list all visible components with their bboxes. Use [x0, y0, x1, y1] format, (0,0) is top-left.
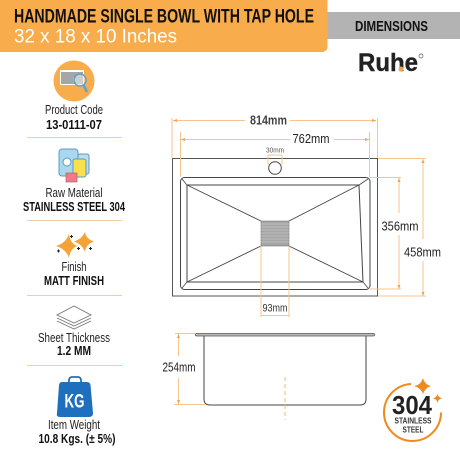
- badge: 304 stainless steel: STEEL: [402, 426, 424, 434]
- drain: [261, 221, 289, 246]
- dimension: 762mm bowl width: 762mm: [292, 132, 330, 146]
- sink side view: [196, 334, 374, 420]
- sink top view: [172, 158, 378, 296]
- icon: KG weight: KG: [64, 392, 84, 412]
- icon: steel drums: [59, 149, 89, 182]
- tap hole: [269, 162, 281, 174]
- dimension: 356mm bowl depth: [370, 178, 418, 289]
- raw material item: [23, 149, 125, 214]
- dimension: 762mm bowl width: [180, 132, 370, 177]
- dimension: 30mm tap hole: 30mm: [266, 148, 284, 154]
- panel: specifications: [23, 60, 125, 446]
- dimension: 30mm tap hole: [266, 148, 284, 165]
- dimension: 254mm height: 254mm: [162, 360, 196, 374]
- dimensions tab: DIMENSIONS: [355, 18, 428, 35]
- title banner: [0, 0, 328, 52]
- icon: barcode under magnifier: [54, 60, 94, 102]
- dimension: 814mm width: [172, 114, 378, 158]
- dimension: 814mm width: 814mm: [250, 114, 287, 128]
- icon: sparkles: [56, 232, 94, 258]
- product code item: Product Code: [45, 103, 103, 117]
- finish item: MATT FINISH: [44, 274, 104, 288]
- brand logo: Ruhe: [358, 49, 418, 77]
- badge: 304 stainless steel: 304: [392, 390, 432, 420]
- dimension: 458mm overall depth: [378, 158, 441, 296]
- title banner: 32 x 18 x 10 Inches: [14, 26, 177, 48]
- product code item: 13-0111-07: [46, 118, 102, 132]
- dimension: 356mm bowl depth: 356mm: [382, 220, 418, 234]
- finish item: Finish: [62, 260, 87, 274]
- dimension: 93mm drain: 93mm: [262, 302, 288, 314]
- dimension: 93mm drain: [261, 246, 289, 317]
- sheet thickness item: 1.2 MM: [57, 344, 91, 358]
- title banner: HANDMADE SINGLE BOWL WITH TAP HOLE: [14, 6, 314, 28]
- dimensions tab: [320, 12, 460, 39]
- sheet thickness item: [38, 306, 110, 358]
- icon: stacked sheets: [57, 306, 91, 329]
- finish item: [44, 232, 104, 288]
- raw material item: STAINLESS STEEL 304: [23, 200, 125, 214]
- badge: 304 stainless steel: STAINLESS: [394, 416, 432, 426]
- badge: 304 stainless steel: [384, 378, 442, 441]
- dimension: 254mm height: [162, 334, 205, 404]
- item weight item: [38, 377, 116, 446]
- item weight item: 10.8 Kgs. (± 5%): [38, 432, 116, 446]
- raw material item: Raw Material: [46, 186, 102, 200]
- product code item: [45, 60, 103, 132]
- sheet thickness item: Sheet Thickness: [38, 331, 110, 345]
- dimension: 458mm overall depth: 458mm: [404, 246, 441, 260]
- item weight item: Item Weight: [48, 418, 100, 432]
